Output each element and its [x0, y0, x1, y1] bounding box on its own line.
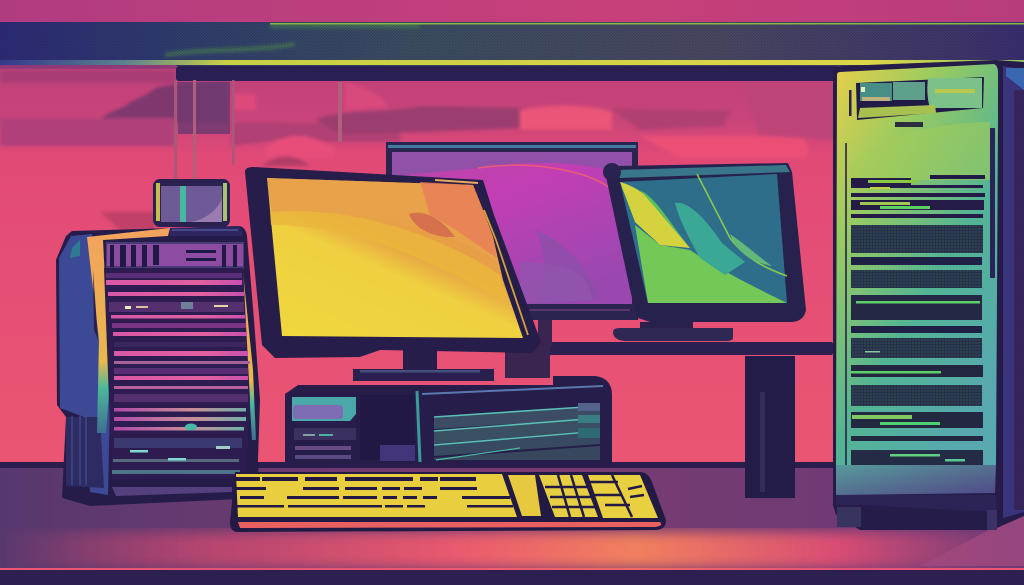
- left server monitor: [153, 179, 230, 227]
- computer base unit: [285, 376, 612, 465]
- right server tower: [833, 60, 1024, 530]
- wall clouds: [0, 70, 835, 230]
- ceiling beam: [0, 22, 1024, 69]
- keyboard: [230, 472, 666, 532]
- server rack lines: [106, 273, 250, 474]
- purple monitor: [386, 142, 638, 320]
- drive bay panel: [292, 397, 356, 459]
- left server tower: [56, 226, 260, 506]
- back shelf rail and poles: [174, 66, 840, 182]
- green monitor: [603, 163, 806, 341]
- rack slots: [851, 175, 985, 465]
- yellow main monitor: [245, 167, 541, 381]
- server display panel: [856, 77, 984, 120]
- drive slots: [434, 403, 600, 460]
- floor: [0, 462, 1024, 585]
- desk: [505, 320, 833, 498]
